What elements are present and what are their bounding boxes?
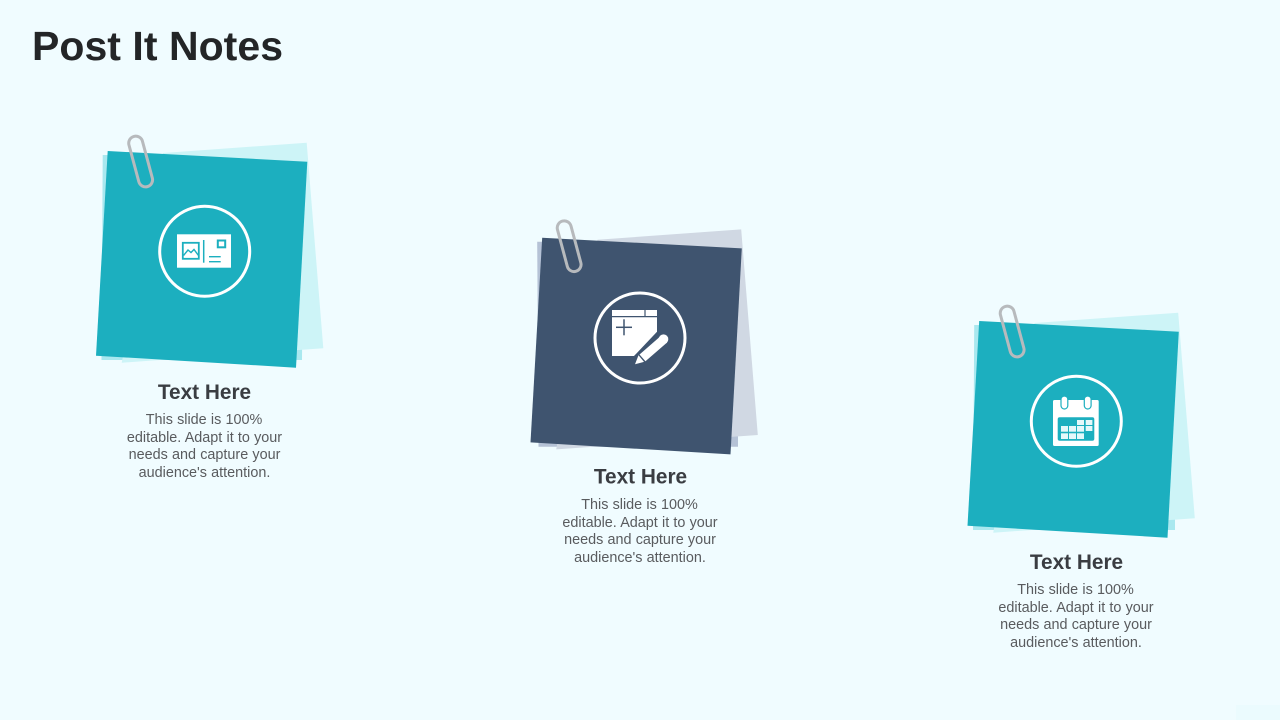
icon: note and pencil xyxy=(612,310,668,364)
icon: paperclip xyxy=(127,135,154,188)
heading: note 3: Text Here xyxy=(1030,551,1123,574)
text block: note 2: This slide is 100% xyxy=(581,497,698,513)
icon: paperclip xyxy=(999,305,1026,358)
text block: note 2: audience's attention. xyxy=(574,550,706,566)
panel: note 2 xyxy=(530,219,758,566)
icon: circle ring xyxy=(595,293,685,383)
text block: note 3: needs and capture your xyxy=(1000,617,1152,633)
icon: postcard xyxy=(177,234,231,268)
text block: note 1: needs and capture your xyxy=(129,447,281,463)
text block: note 1: audience's attention. xyxy=(139,465,270,481)
text block: note 3: editable. Adapt it to your xyxy=(998,600,1154,616)
panel: note 1 xyxy=(96,135,323,481)
heading: note 2: Text Here xyxy=(594,466,687,489)
icon: circle ring xyxy=(160,206,250,296)
icon: calendar xyxy=(1053,396,1099,446)
title: Post It Notes xyxy=(32,23,283,69)
icon: paperclip xyxy=(556,219,583,273)
text block: note 3: audience's attention. xyxy=(1010,635,1142,651)
icon: circle ring xyxy=(1031,376,1121,466)
heading: note 1: Text Here xyxy=(158,381,251,404)
panel: note 3 xyxy=(968,305,1195,651)
text block: note 1: This slide is 100% xyxy=(146,412,262,428)
text block: note 2: needs and capture your xyxy=(564,532,716,548)
text block: note 1: editable. Adapt it to your xyxy=(127,430,282,446)
text block: note 3: This slide is 100% xyxy=(1017,582,1134,598)
text block: note 2: editable. Adapt it to your xyxy=(562,515,718,531)
